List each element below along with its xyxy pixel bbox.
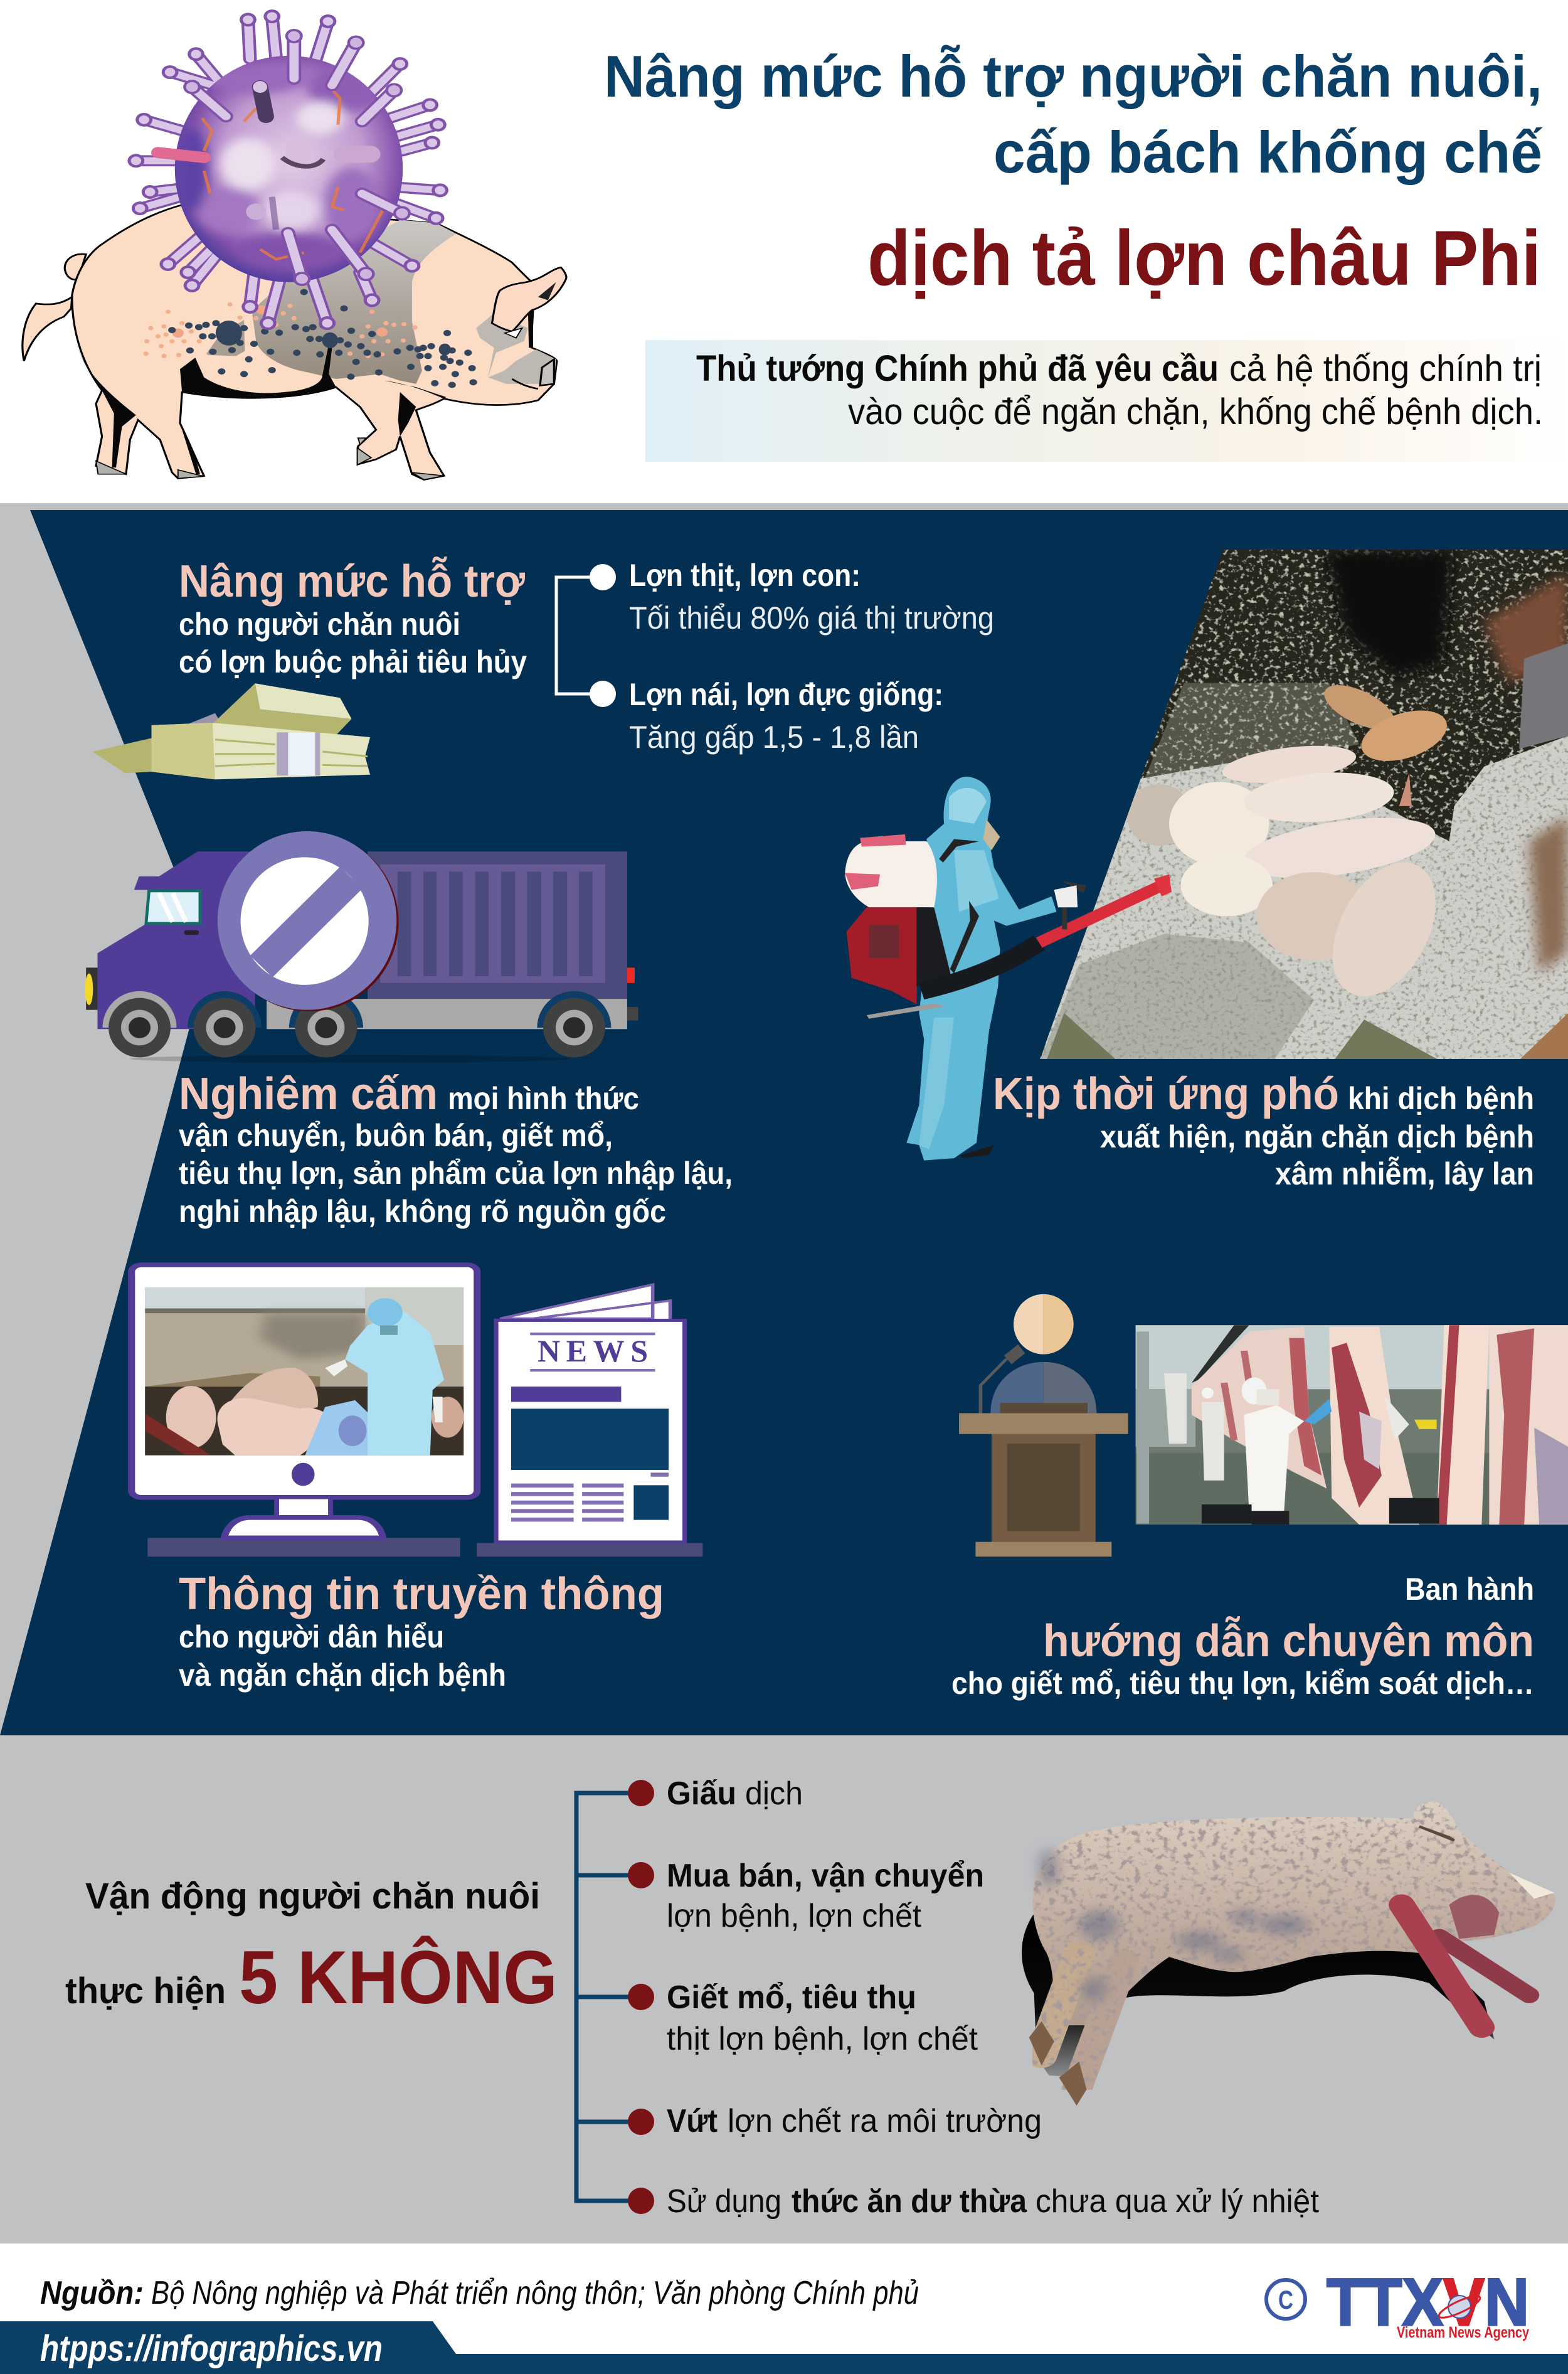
heading: strictly forbidden: mọi hình thức: [448, 1081, 639, 1116]
item 2: lợn bệnh, lợn chết: [667, 1898, 922, 1934]
heading: timely response: khi dịch bệnh: [1348, 1081, 1534, 1116]
item 3: Giết mổ, tiêu thụ: [667, 1979, 916, 2016]
illustration: diseased dead pig: [1022, 1801, 1555, 2105]
bracket: support rates: Lợn thịt, lợn con:: [629, 558, 861, 593]
heading: strictly forbidden: vận chuyển, buôn bán, giết mổ,: [179, 1118, 613, 1153]
hose and nozzle: [921, 942, 1039, 991]
prohibition sign: [218, 831, 399, 1011]
heading: support level: cho người chăn nuôi: [179, 607, 460, 642]
source line: Bộ Nông nghiệp và Phát triển nông thôn; Văn phòng Chính phủ: [151, 2275, 919, 2311]
heading: five no's campaign: [65, 1876, 558, 2020]
item 4: lợn chết ra môi trường: [728, 2103, 1042, 2139]
heading: professional guidance: cho giết mổ, tiêu thụ lợn, kiểm soát dịch…: [951, 1666, 1534, 1701]
icon: worker spraying disinfectant: [845, 777, 1172, 1161]
item 5: thức ăn dư thừa: [792, 2183, 1027, 2220]
workers: [1164, 1373, 1439, 1525]
lead text block: [645, 340, 1568, 462]
truck wheels: [102, 991, 611, 1028]
icon: truck with prohibition sign: [85, 831, 638, 1063]
lead text block: Thủ tướng Chính phủ đã yêu cầu: [696, 348, 1219, 389]
photo: dead pigs in pit: [1034, 550, 1568, 1060]
panel: five-no grey background: [0, 1735, 1568, 2244]
footer band with url: [0, 2321, 1568, 2374]
heading: media communication: và ngăn chặn dịch bệnh: [179, 1658, 506, 1693]
virus spikes behind: [136, 16, 440, 323]
panel: navy measures background: [0, 510, 1568, 1735]
bracket: support rates: Tăng gấp 1,5 - 1,8 lần: [629, 720, 919, 755]
illustration: pig infected by virus: [23, 16, 566, 480]
virus spikes front: [192, 36, 402, 279]
straps: [939, 839, 979, 974]
icon: newspaper: [477, 1285, 702, 1557]
bracket: support rates: Tối thiểu 80% giá thị trường: [629, 600, 994, 636]
item 5: [667, 2183, 1320, 2220]
heading: support level: Nâng mức hỗ trợ: [179, 556, 526, 607]
red legs: [1439, 1937, 1529, 1995]
heading: five no's campaign: thực hiện: [65, 1971, 226, 2011]
item 4: Vứt: [667, 2103, 718, 2139]
tank: [845, 841, 937, 907]
pig grey shading: [252, 220, 456, 384]
heading: five no's campaign: 5 KHÔNG: [239, 1935, 558, 2020]
engine: [847, 907, 919, 1004]
heading: media communication: [179, 1569, 664, 1693]
heading: five no's campaign: Vận động người chăn nuôi: [85, 1876, 540, 1917]
item 3: thịt lợn bệnh, lợn chết: [667, 2021, 978, 2057]
item 2: Mua bán, vận chuyển: [667, 1858, 984, 1894]
heading: timely response: xuất hiện, ngăn chặn dịch bệnh: [1100, 1119, 1534, 1154]
heading: media communication: Thông tin truyền thông: [179, 1569, 664, 1619]
heading: media communication: cho người dân hiểu: [179, 1619, 444, 1654]
item 5: Sử dụng: [667, 2183, 781, 2220]
footer band with url: htpps://infographics.vn: [40, 2328, 383, 2369]
bruises: [1039, 1848, 1309, 2001]
heading: strictly forbidden: [179, 1069, 733, 1229]
heading: strictly forbidden: Nghiêm cấm: [179, 1069, 438, 1119]
heading: professional guidance: [951, 1572, 1534, 1701]
heading: strictly forbidden: tiêu thụ lợn, sản phẩm của lợn nhập lậu,: [179, 1156, 733, 1191]
pig skin spots: [146, 304, 415, 356]
pig tail and curl: [23, 254, 86, 361]
pig hooves: [96, 438, 444, 480]
icon: money stacks: [93, 683, 370, 779]
tree diagram: five no's: [576, 1775, 1320, 2220]
monitor photo pigs: [166, 1386, 216, 1449]
heading: timely response: xâm nhiễm, lây lan: [1275, 1156, 1534, 1191]
heading: strictly forbidden: nghi nhập lậu, không rõ nguồn gốc: [179, 1194, 666, 1229]
logo: TTXVN: C: [1278, 2285, 1293, 2314]
logo: TTXVN: Vietnam News Agency: [1397, 2324, 1529, 2341]
item 3: [667, 1979, 978, 2057]
monitor photo vet: [345, 1312, 444, 1456]
logo: TTXVN: TTXVN: [1327, 2264, 1529, 2339]
lead text block: cả hệ thống chính trị: [1229, 348, 1542, 389]
heading: timely response: [993, 1069, 1534, 1191]
icon: speaker at podium: [959, 1294, 1128, 1557]
heading: support level: [179, 556, 527, 679]
pig black shadows: [76, 310, 534, 474]
item 1: Giấu: [667, 1775, 736, 1812]
item 1: [667, 1775, 803, 1812]
pig body: [72, 203, 557, 480]
heading: support level: có lợn buộc phải tiêu hủy: [179, 644, 527, 679]
pigs: [1126, 676, 1456, 1009]
source line: Nguồn:: [40, 2275, 144, 2311]
bracket: support rates: [556, 558, 994, 755]
newspaper masthead: NEWS: [538, 1333, 648, 1368]
virus orange streaks: [202, 85, 388, 259]
title: [604, 43, 1543, 302]
heading: professional guidance: Ban hành: [1405, 1572, 1534, 1607]
protective suit: [906, 777, 1057, 1161]
carcasses: [1192, 1325, 1568, 1525]
lead text block: vào cuộc để ngăn chặn, khống chế bệnh dịch.: [848, 391, 1543, 432]
photo: slaughterhouse: [1136, 1325, 1568, 1525]
bracket: support rates: Lợn nái, lợn đực giống:: [629, 677, 943, 712]
item 2: [667, 1858, 984, 1934]
title: Nâng mức hỗ trợ người chăn nuôi,: [604, 43, 1542, 109]
item 1: dịch: [745, 1775, 803, 1812]
dead pig body and hind legs: [1032, 1801, 1555, 2090]
monitor photo: [145, 1287, 464, 1456]
title: cấp bách khống chế: [993, 119, 1543, 185]
pig ear and face: [492, 267, 566, 331]
heading: timely response: Kịp thời ứng phó: [993, 1069, 1339, 1119]
icon: monitor with photo: [132, 1265, 477, 1557]
item 5: chưa qua xử lý nhiệt: [1036, 2183, 1320, 2220]
virus sphere: [175, 56, 403, 282]
heading: professional guidance: hướng dẫn chuyên môn: [1043, 1616, 1534, 1666]
